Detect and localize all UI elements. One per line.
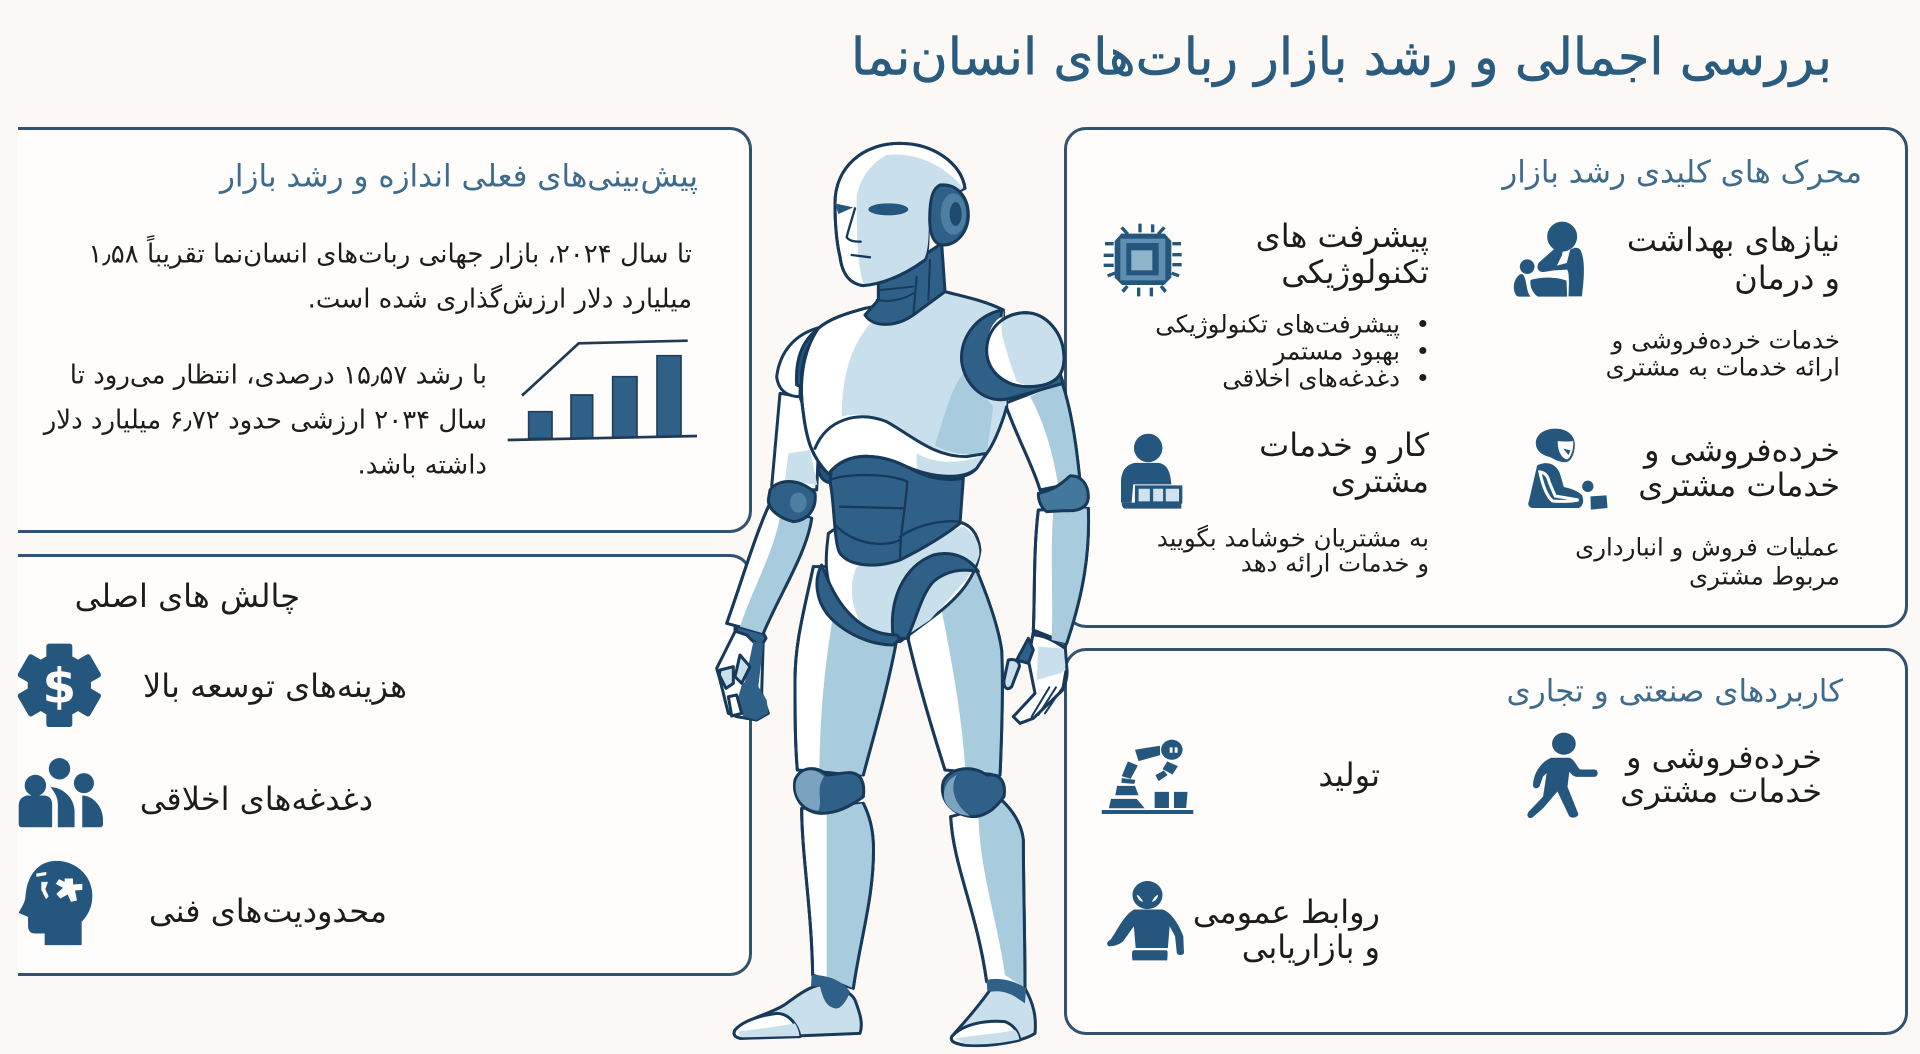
viewer-right knee [942, 769, 1004, 817]
viewer-right elbow [1038, 476, 1088, 512]
icon: gear with dollar: $ [43, 658, 76, 714]
viewer-left upper arm [772, 393, 818, 490]
viewer-left elbow [768, 482, 815, 522]
driver title: labor and customer service: کار و خدمات [1259, 426, 1429, 464]
viewer-right upper arm [1005, 382, 1080, 490]
driver title: healthcare second line: و درمان [1734, 259, 1840, 297]
icon: healthcare person [1514, 222, 1584, 297]
title: بررسی اجمالی و رشد بازار ربات‌های انسان‌نما [851, 28, 1832, 87]
legs and feet [717, 567, 1067, 1046]
text: growth forecast: با رشد ۱۵٫۵۷ درصدی، انتظار می‌رود تا [70, 360, 487, 390]
driver text: greet customers: به مشتریان خوشامد بگویید [1157, 523, 1429, 552]
driver text: sales and warehouse: عملیات فروش و انبارداری [1575, 532, 1840, 561]
panel: key market growth drivers: • [1416, 336, 1430, 365]
driver title: tech progress second line: تکنولوژیکی [1281, 253, 1429, 291]
viewer-right forearm [1033, 508, 1089, 643]
application title: manufacturing: تولید [1318, 756, 1380, 794]
viewer-right thigh [908, 567, 1002, 775]
panel heading: drivers: محرک های کلیدی رشد بازار [1502, 154, 1862, 190]
text: 2024 market value: تا سال ۲۰۲۴، بازار جهانی ربات‌های انسان‌نما تقریباً ۱٫۵۸ [88, 239, 692, 269]
driver text: customer related: مربوط مشتری [1689, 561, 1840, 590]
icon: microchip [1104, 224, 1182, 296]
application title: retail second line: خدمات مشتری [1620, 772, 1822, 810]
driver title: labor second line: مشتری [1331, 462, 1429, 500]
face [868, 203, 908, 215]
icon: walking person [1527, 732, 1598, 818]
viewer-right hand [1013, 632, 1067, 723]
driver text: customer services: ارائه خدمات به مشتری [1606, 352, 1840, 381]
viewer-left foot [734, 985, 861, 1038]
viewer-left thigh [795, 567, 897, 775]
application title: public relations: روابط عمومی [1193, 893, 1380, 931]
driver text: retail services: خدمات خرده‌فروشی و [1612, 325, 1840, 354]
panel heading: challenges: چالش های اصلی [75, 577, 300, 615]
panel heading: applications: کاربردهای صنعتی و تجاری [1507, 673, 1843, 709]
viewer-right shoulder [962, 310, 1063, 400]
icon: retail person [1528, 428, 1608, 510]
viewer-left shin [802, 803, 873, 988]
driver title: retail: خرده‌فروشی و [1644, 431, 1840, 469]
driver title: tech progress: پیشرفت های [1256, 217, 1429, 255]
panel: key market growth drivers: • [1416, 309, 1430, 338]
abdomen [828, 449, 963, 565]
icon: industrial robot arm [1102, 740, 1194, 814]
text: growth forecast second line: سال ۲۰۳۴ ارزشی حدود ۶٫۷۲ میلیارد دلار [44, 405, 487, 435]
panel: market size and growth [18, 127, 752, 533]
hip joints [892, 554, 978, 638]
bullet list: ethical concerns: دغدغه‌های اخلاقی [1222, 363, 1400, 392]
application title: marketing: و بازاریابی [1242, 928, 1380, 966]
viewer-right shin [951, 802, 1025, 988]
panel: key market growth drivers: • [1416, 363, 1430, 392]
viewer-left knee [794, 769, 864, 813]
application title: retail: خرده‌فروشی و [1626, 738, 1822, 776]
icon: worker at desk [1121, 434, 1182, 509]
icon: gear with dollar [18, 644, 101, 727]
torso [801, 292, 1007, 478]
icon: head with symbols [18, 860, 92, 946]
challenge: ethical concerns: دغدغه‌های اخلاقی [140, 780, 373, 818]
viewer-left hand [717, 622, 768, 720]
viewer-left forearm [727, 503, 812, 633]
icon: growth bar chart [508, 339, 698, 442]
challenge: technical limitations: محدودیت‌های فنی [149, 892, 387, 930]
viewer-left shoulder [777, 327, 820, 397]
bullet list: tech progress: پیشرفت‌های تکنولوژیکی [1155, 309, 1400, 338]
driver text: provide services: و خدمات ارائه دهد [1241, 548, 1429, 577]
challenge: high development costs: هزینه‌های توسعه بالا [143, 667, 407, 705]
icon: robot figure [1107, 881, 1184, 960]
ear [930, 185, 968, 245]
driver title: healthcare needs: نیازهای بهداشت [1627, 221, 1840, 259]
neck [865, 243, 945, 324]
icon: group of people [18, 758, 103, 828]
text: growth forecast third line: داشته باشد. [358, 450, 487, 480]
panel: industrial and commercial applications [1064, 648, 1908, 1035]
upper body [727, 143, 1089, 645]
panel: key market growth drivers [1064, 127, 1908, 628]
bullet list: continuous improvement: بهبود مستمر [1274, 336, 1400, 365]
pelvis [826, 522, 980, 642]
viewer-right foot [951, 988, 1035, 1045]
head [835, 143, 965, 286]
driver title: retail second line: خدمات مشتری [1638, 466, 1840, 504]
text: 2024 market value second line: میلیارد دلار ارزش‌گذاری شده است. [308, 284, 692, 314]
panel: main challenges [18, 554, 752, 976]
panel heading: forecasts: پیش‌بینی‌های فعلی اندازه و رشد بازار [220, 158, 698, 194]
